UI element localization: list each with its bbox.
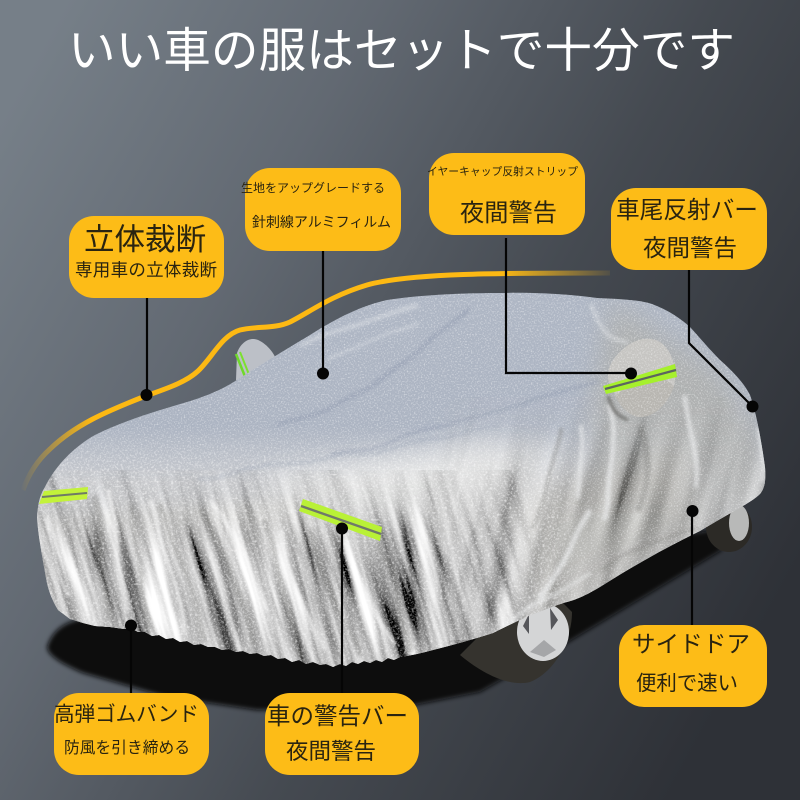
callout: イヤーキャップ反射ストリップ [427, 153, 585, 235]
callout: イヤーキャップ反射ストリップ: 夜間警告 [460, 200, 557, 227]
callout: 高弾ゴムバンド: 防風を引き締める [64, 739, 190, 757]
callout: 立体裁断 [69, 216, 224, 298]
callout: 高弾ゴムバンド [54, 693, 209, 775]
callout: サイドドア: サイドドア [632, 631, 750, 657]
callout: 生地をアップグレードする: 針刺線アルミフィルム [252, 214, 391, 230]
callout: 生地をアップグレードする [241, 168, 401, 251]
hood creases [200, 308, 600, 480]
callout: イヤーキャップ反射ストリップ: イヤーキャップ反射ストリップ [427, 164, 578, 178]
front wrinkles light [48, 490, 395, 650]
callout: 車の警告バー: 車の警告バー [267, 703, 408, 729]
rear wheel [706, 502, 752, 552]
front wrinkles dark [95, 495, 410, 655]
callout: サイドドア [619, 625, 767, 707]
callout: サイドドア: 便利で速い [636, 672, 738, 695]
callout: 生地をアップグレードする: 生地をアップグレードする [241, 181, 385, 195]
vertical streak wrinkles on front [37, 470, 538, 667]
reflective strip: right mirror [603, 364, 677, 394]
vertical streak folds on side [436, 416, 765, 640]
callout: 車の警告バー: 夜間警告 [286, 739, 376, 764]
right mirror [606, 338, 675, 422]
callout: 車尾反射バー: 車尾反射バー [616, 197, 758, 224]
callout: 立体裁断: 立体裁断 [84, 223, 206, 257]
left mirror [236, 339, 276, 380]
title: いい車の服はセットで十分です [68, 25, 735, 78]
reflective sparkle texture [30, 285, 775, 675]
orange contour curve [23, 273, 610, 490]
front wheel [460, 600, 572, 683]
side panel folds [500, 395, 762, 630]
leader lines and dots [131, 238, 752, 694]
car shadow [47, 530, 722, 710]
cover shading: bright band [274, 436, 551, 521]
cover shading: rear and door panels [590, 310, 766, 541]
car cover [37, 292, 766, 667]
callout: 車の警告バー [265, 693, 419, 775]
callout: 車尾反射バー [611, 188, 767, 270]
callout: 立体裁断: 専用車の立体裁断 [75, 260, 217, 280]
callout: 高弾ゴムバンド: 高弾ゴムバンド [54, 703, 199, 726]
callout: 車尾反射バー: 夜間警告 [643, 235, 737, 261]
reflective strip: front left [39, 487, 88, 504]
reflective strip: hood [299, 499, 382, 541]
